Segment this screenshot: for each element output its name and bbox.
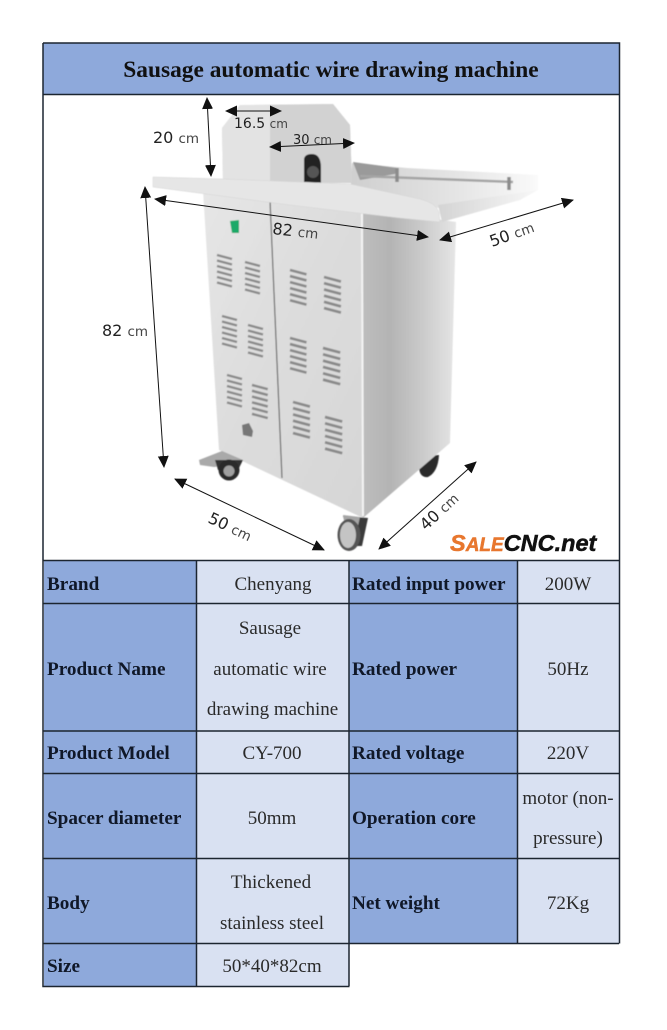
row: Body: Body — [47, 893, 90, 914]
dimension: 30 cm — [270, 133, 354, 148]
dimension: 50 cm tray: 50 cm — [487, 217, 537, 251]
row: Spacer diameter: pressure) — [533, 828, 603, 849]
header cell backgrounds — [44, 561, 517, 986]
watermark: SaleCNC.net: SALECNC.net — [450, 530, 598, 556]
row: Size: 50*40*82cm — [222, 956, 322, 977]
dimension: 82 cm top edge: 82 cm — [272, 219, 319, 243]
dimension: 20 cm — [153, 98, 211, 176]
row: Body — [47, 872, 590, 934]
row: Product Name: automatic wire — [213, 659, 327, 680]
row: Body: 72Kg — [547, 893, 590, 914]
row: Product Name: 50Hz — [547, 659, 589, 680]
dimension: 40 cm base: 40 cm — [416, 489, 462, 534]
key lock — [242, 423, 253, 437]
table top — [153, 177, 440, 222]
dimension: 50 cm base — [175, 479, 324, 550]
row: Product Model: 220V — [547, 743, 589, 764]
row: Product Name — [47, 618, 589, 720]
dimension: 16.5 cm: 16.5 cm — [234, 116, 288, 132]
green power switch — [230, 220, 239, 233]
row: Brand: Brand — [47, 574, 100, 595]
row: Product Model: Product Model — [47, 743, 170, 764]
row: Product Model: Rated voltage — [352, 743, 465, 764]
row: Body: stainless steel — [220, 913, 324, 934]
front brake caster — [199, 451, 243, 480]
corner highlight — [362, 212, 363, 516]
dimension: 20 cm: 20 cm — [153, 128, 199, 147]
row: Spacer diameter: motor (non- — [522, 788, 614, 809]
row: Body: Net weight — [352, 893, 441, 914]
value cell backgrounds — [196, 561, 619, 986]
row: Product Name: Sausage — [239, 618, 301, 639]
dimension: 82 cm height: 82 cm — [102, 321, 148, 340]
machine illustration — [153, 104, 538, 551]
row: Spacer diameter: Spacer diameter — [47, 808, 182, 829]
row: Brand: Rated input power — [352, 574, 506, 595]
title bar — [44, 44, 619, 94]
row: Brand — [47, 574, 591, 595]
row: Product Name: drawing machine — [207, 699, 338, 720]
product photo panel — [44, 95, 619, 560]
row: Spacer diameter: Operation core — [352, 808, 476, 829]
dimension: 82 cm top edge — [155, 199, 428, 243]
row: Product Name: Product Name — [47, 659, 166, 680]
row: Product Model: CY-700 — [242, 743, 302, 764]
row: Size: Size — [47, 956, 81, 977]
title: Sausage automatic wire drawing machine — [123, 57, 539, 83]
specification table — [43, 43, 620, 986]
rear casters — [419, 455, 439, 477]
row: Product Model — [47, 743, 589, 764]
dimension: 50 cm base: 50 cm — [205, 508, 255, 545]
tray with rods — [350, 162, 538, 222]
door seam — [270, 200, 282, 478]
machine body side — [362, 208, 456, 518]
row: Body: Thickened — [231, 872, 312, 893]
row: Spacer diameter — [47, 788, 614, 849]
dimension: 16.5 cm — [226, 111, 288, 132]
ventilation slats — [217, 255, 342, 453]
dimension: 40 cm base — [379, 462, 476, 549]
dimension: 50 cm tray — [440, 200, 573, 251]
row: Size — [47, 956, 322, 977]
grid lines — [43, 43, 620, 986]
dimension: 82 cm height — [102, 187, 164, 467]
row: Product Name: Rated power — [352, 659, 457, 680]
head housing — [222, 104, 352, 183]
row: Spacer diameter: 50mm — [248, 808, 296, 829]
dimension: 30 cm: 30 cm — [293, 133, 332, 148]
corner caster — [338, 515, 368, 551]
row: Brand: 200W — [545, 574, 591, 595]
row: Brand: Chenyang — [234, 574, 312, 595]
machine body front — [203, 190, 363, 518]
